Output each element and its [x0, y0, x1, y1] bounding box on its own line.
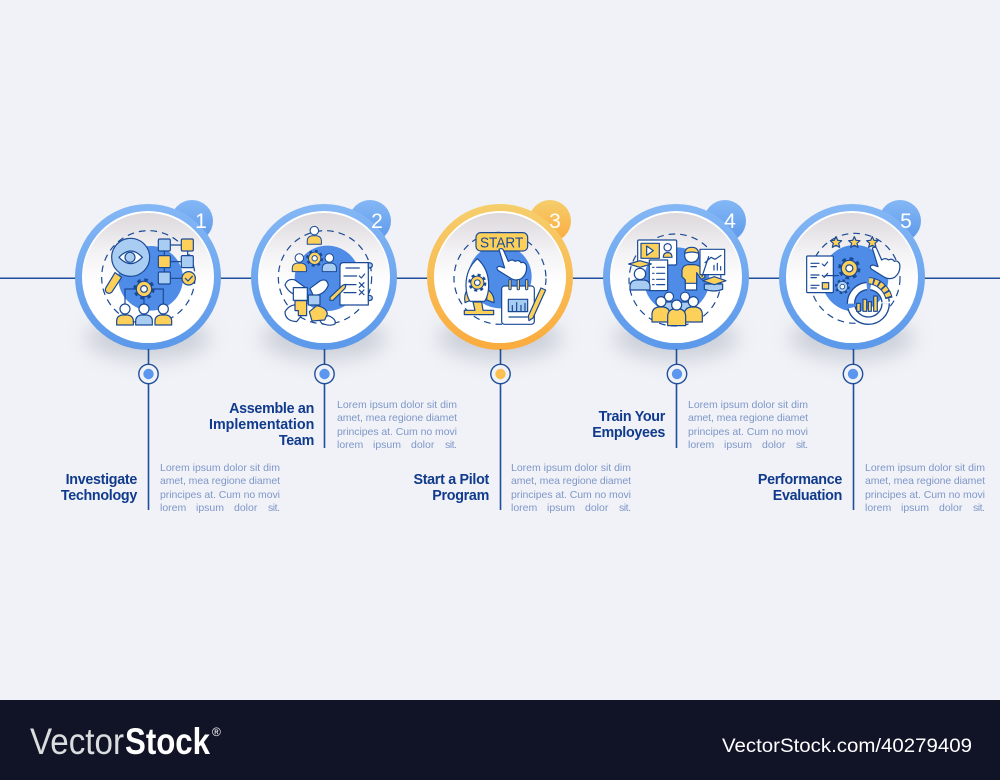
step 1 ring — [75, 204, 221, 350]
step 3 title: Program — [432, 488, 489, 504]
step 1 body text: lorem — [160, 502, 187, 514]
step 2 number: 2 — [371, 210, 383, 233]
icon: rocket start — [454, 232, 546, 324]
step 3 body text: sit. — [619, 502, 631, 514]
step 1 title: Investigate — [66, 472, 137, 488]
step 3 body text: principes at. Cum no movi — [511, 489, 631, 501]
step 2 title: Team — [279, 433, 314, 449]
step 4 badge — [704, 200, 746, 242]
step 4 number: 4 — [724, 210, 736, 233]
step 5 badge — [879, 200, 921, 242]
step 4 body text: lorem — [688, 439, 715, 451]
step 3 — [427, 200, 573, 360]
step 2 body text: principes at. Cum no movi — [337, 426, 457, 438]
step 2 body text: Lorem ipsum dolor sit dim — [337, 399, 457, 411]
footer image id: VectorStock.com/40279409 — [722, 735, 972, 757]
step 1 number: 1 — [195, 210, 207, 233]
step 3 ring — [427, 204, 573, 350]
step 1 — [75, 200, 221, 360]
step 4 body text: ipsum — [724, 439, 752, 451]
step 1 title: Technology — [61, 488, 137, 504]
step 4 body text: Lorem ipsum dolor sit dim — [688, 399, 808, 411]
step 5 title: Evaluation — [773, 488, 842, 504]
icon: employee training — [629, 234, 726, 326]
footer logo: Vector — [30, 721, 124, 762]
footer logo: ® — [212, 725, 221, 739]
icon: performance evaluation — [807, 233, 900, 323]
step 4 body text: sit. — [796, 439, 808, 451]
footer logo: Stock — [125, 721, 210, 762]
step 3 body text: amet, mea regione diamet — [511, 475, 631, 487]
step 4 body text: dolor — [762, 439, 786, 451]
step 5 — [779, 200, 925, 360]
step 2 ring — [251, 204, 397, 350]
step 4 connector — [667, 349, 687, 448]
step 3 title: Start a Pilot — [413, 472, 490, 488]
step 4 body text: amet, mea regione diamet — [688, 412, 808, 424]
step 4 title: Employees — [592, 425, 665, 441]
step 1 body text: Lorem ipsum dolor sit dim — [160, 462, 280, 474]
step 1 body text: principes at. Cum no movi — [160, 489, 280, 501]
step 5 connector — [843, 349, 863, 510]
step 2 badge — [349, 200, 391, 242]
step 4 body text: principes at. Cum no movi — [688, 426, 808, 438]
step 1 connector — [139, 349, 158, 510]
step 2 — [251, 200, 397, 360]
step 3 badge — [529, 200, 571, 242]
icon: implementation team — [278, 226, 372, 325]
icon: technology inspection — [102, 231, 195, 325]
step 1 badge — [171, 200, 213, 242]
footer bar — [0, 700, 1000, 780]
step 5 number: 5 — [900, 210, 912, 233]
step 2 body text: sit. — [445, 439, 457, 451]
step 3 body text: ipsum — [547, 502, 575, 514]
step 4 title: Train Your — [599, 409, 666, 425]
step 4 — [603, 200, 749, 360]
step 1 body text: amet, mea regione diamet — [160, 475, 280, 487]
step 5 title: Performance — [758, 472, 842, 488]
step 4 ring — [603, 204, 749, 350]
step 3 body text: dolor — [585, 502, 609, 514]
step 2 connector — [315, 349, 334, 448]
icon: rocket start: START — [480, 234, 523, 251]
step 5 body text: sit. — [973, 502, 985, 514]
step 3 body text: lorem — [511, 502, 538, 514]
step 5 body text: lorem — [865, 502, 892, 514]
step 1 body text: sit. — [268, 502, 280, 514]
step 2 title: Implementation — [209, 417, 314, 433]
step 2 body text: lorem — [337, 439, 364, 451]
step 5 body text: Lorem ipsum dolor sit dim — [865, 462, 985, 474]
step 3 number: 3 — [549, 210, 561, 233]
step 1 body text: ipsum — [196, 502, 224, 514]
step 2 body text: dolor — [411, 439, 435, 451]
step 3 connector — [491, 349, 510, 510]
step 1 body text: dolor — [234, 502, 258, 514]
step 2 body text: amet, mea regione diamet — [337, 412, 457, 424]
step 5 body text: principes at. Cum no movi — [865, 489, 985, 501]
step 5 ring — [779, 204, 925, 350]
step 5 body text: amet, mea regione diamet — [865, 475, 985, 487]
step 5 body text: ipsum — [901, 502, 929, 514]
step 2 body text: ipsum — [373, 439, 401, 451]
step 5 body text: dolor — [939, 502, 963, 514]
step 3 body text: Lorem ipsum dolor sit dim — [511, 462, 631, 474]
step 2 title: Assemble an — [229, 401, 314, 417]
timeline horizontal line — [0, 278, 1000, 279]
